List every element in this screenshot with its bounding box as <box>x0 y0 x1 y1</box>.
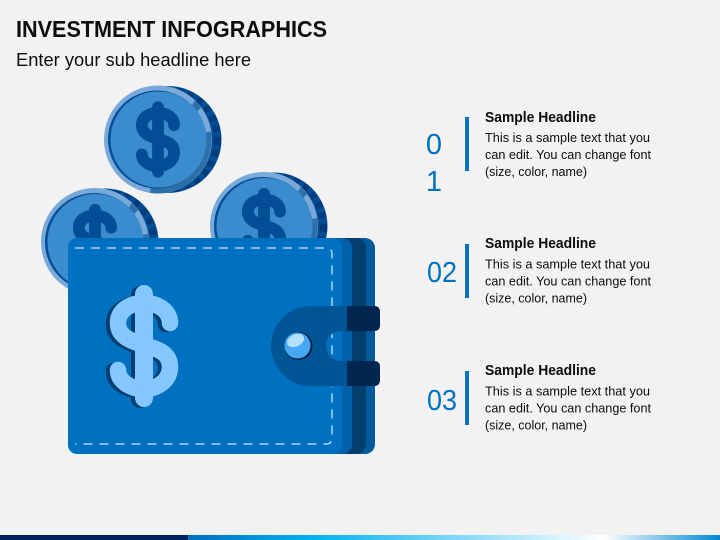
body 02: This is a sample text that you <box>485 256 650 272</box>
body 01 <box>485 130 651 179</box>
item 03 <box>427 363 651 432</box>
icon: top coin <box>104 86 222 194</box>
wallet front panel <box>68 238 342 454</box>
number 01: 1 <box>426 166 442 198</box>
number 02: 02 <box>427 257 457 289</box>
divider 01 <box>465 117 469 171</box>
body 03 <box>485 384 651 432</box>
clasp top tab <box>347 306 380 331</box>
item 01 <box>426 110 651 198</box>
wallet clasp <box>271 306 347 386</box>
number 03: 03 <box>427 385 457 417</box>
body 02 <box>485 256 651 306</box>
body 02: can edit. You can change font <box>485 274 651 288</box>
subtitle: Enter your sub headline here <box>16 49 251 70</box>
number 01: 0 <box>426 129 442 161</box>
clasp bottom tab <box>347 361 380 386</box>
footer bar <box>0 535 720 540</box>
icon: wallet <box>68 238 380 454</box>
body 03: can edit. You can change font <box>485 400 651 416</box>
number 01 <box>426 129 442 198</box>
headline 02: Sample Headline <box>485 236 596 252</box>
wallet stitching <box>75 248 332 444</box>
item 02 <box>427 236 651 306</box>
icon: left coin <box>41 188 158 296</box>
icon: right coin <box>210 172 328 280</box>
body 02: (size, color, name) <box>485 290 587 306</box>
headline 01: Sample Headline <box>485 110 596 126</box>
body 03: (size, color, name) <box>485 418 587 432</box>
title: INVESTMENT INFOGRAPHICS <box>16 16 327 42</box>
clasp button <box>284 331 312 360</box>
body 01: (size, color, name) <box>485 164 587 179</box>
wallet dollar sign <box>114 294 170 399</box>
headline 03: Sample Headline <box>485 363 596 379</box>
body 01: This is a sample text that you <box>485 130 650 145</box>
divider 03 <box>465 371 469 425</box>
divider 02 <box>465 244 469 298</box>
body 03: This is a sample text that you <box>485 384 650 398</box>
body 01: can edit. You can change font <box>485 147 651 162</box>
